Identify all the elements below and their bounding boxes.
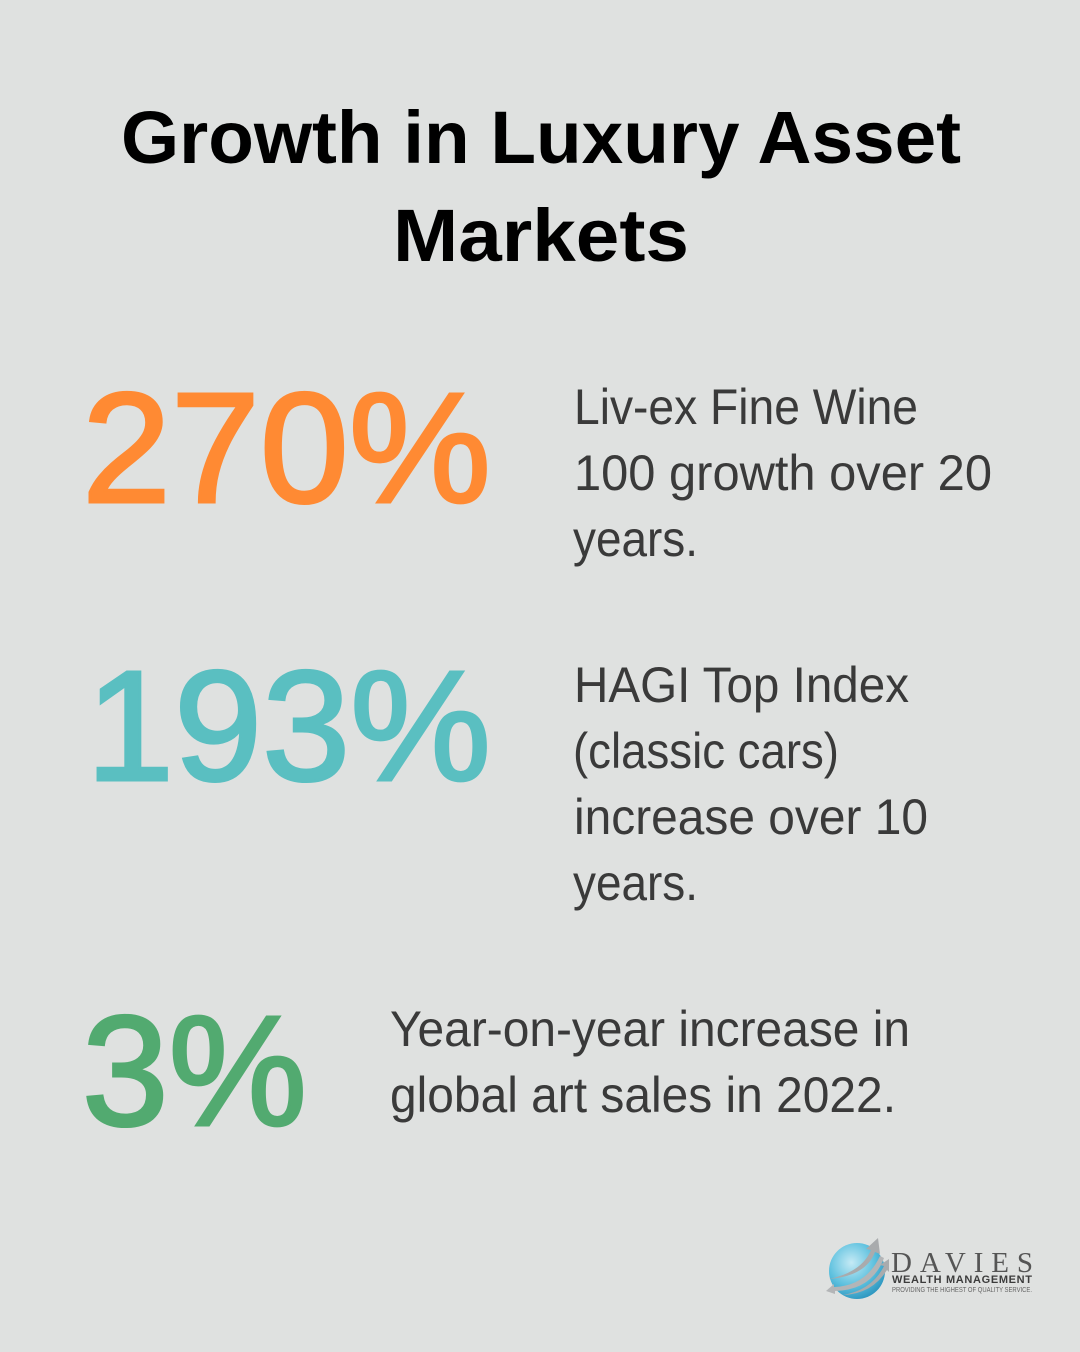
description: wine: 100 growth over 20 [574, 445, 992, 501]
title: Markets [393, 194, 689, 277]
description: wine: years. [573, 511, 698, 567]
description: art sales [390, 1001, 910, 1123]
stat: 270%: 270% [82, 361, 491, 536]
icon: globe with arrows [826, 1238, 889, 1299]
description: wine [573, 379, 992, 567]
logo wordmark: DAVIES [891, 1247, 1033, 1279]
title: Growth in Luxury Asset [121, 96, 961, 179]
description: art sales: Year-on-year increase in [390, 1001, 910, 1057]
logo subtitle: WEALTH MANAGEMENT [892, 1274, 1032, 1286]
stat: 3%: 3% [82, 984, 307, 1159]
description: classic cars: (classic cars) [573, 723, 839, 779]
description: wine: Liv-ex Fine Wine [574, 379, 918, 435]
title [121, 96, 961, 277]
logo: Davies Wealth Management [826, 1238, 1033, 1299]
stat: 193%: 193% [86, 639, 491, 814]
logo tagline: PROVIDING THE HIGHEST OF QUALITY SERVICE. [892, 1287, 1032, 1294]
description: classic cars: HAGI Top Index [574, 657, 909, 713]
description: art sales: global art sales in 2022. [390, 1067, 896, 1123]
description: classic cars: years. [573, 855, 698, 911]
description: classic cars [573, 657, 928, 911]
description: classic cars: increase over 10 [574, 789, 928, 845]
